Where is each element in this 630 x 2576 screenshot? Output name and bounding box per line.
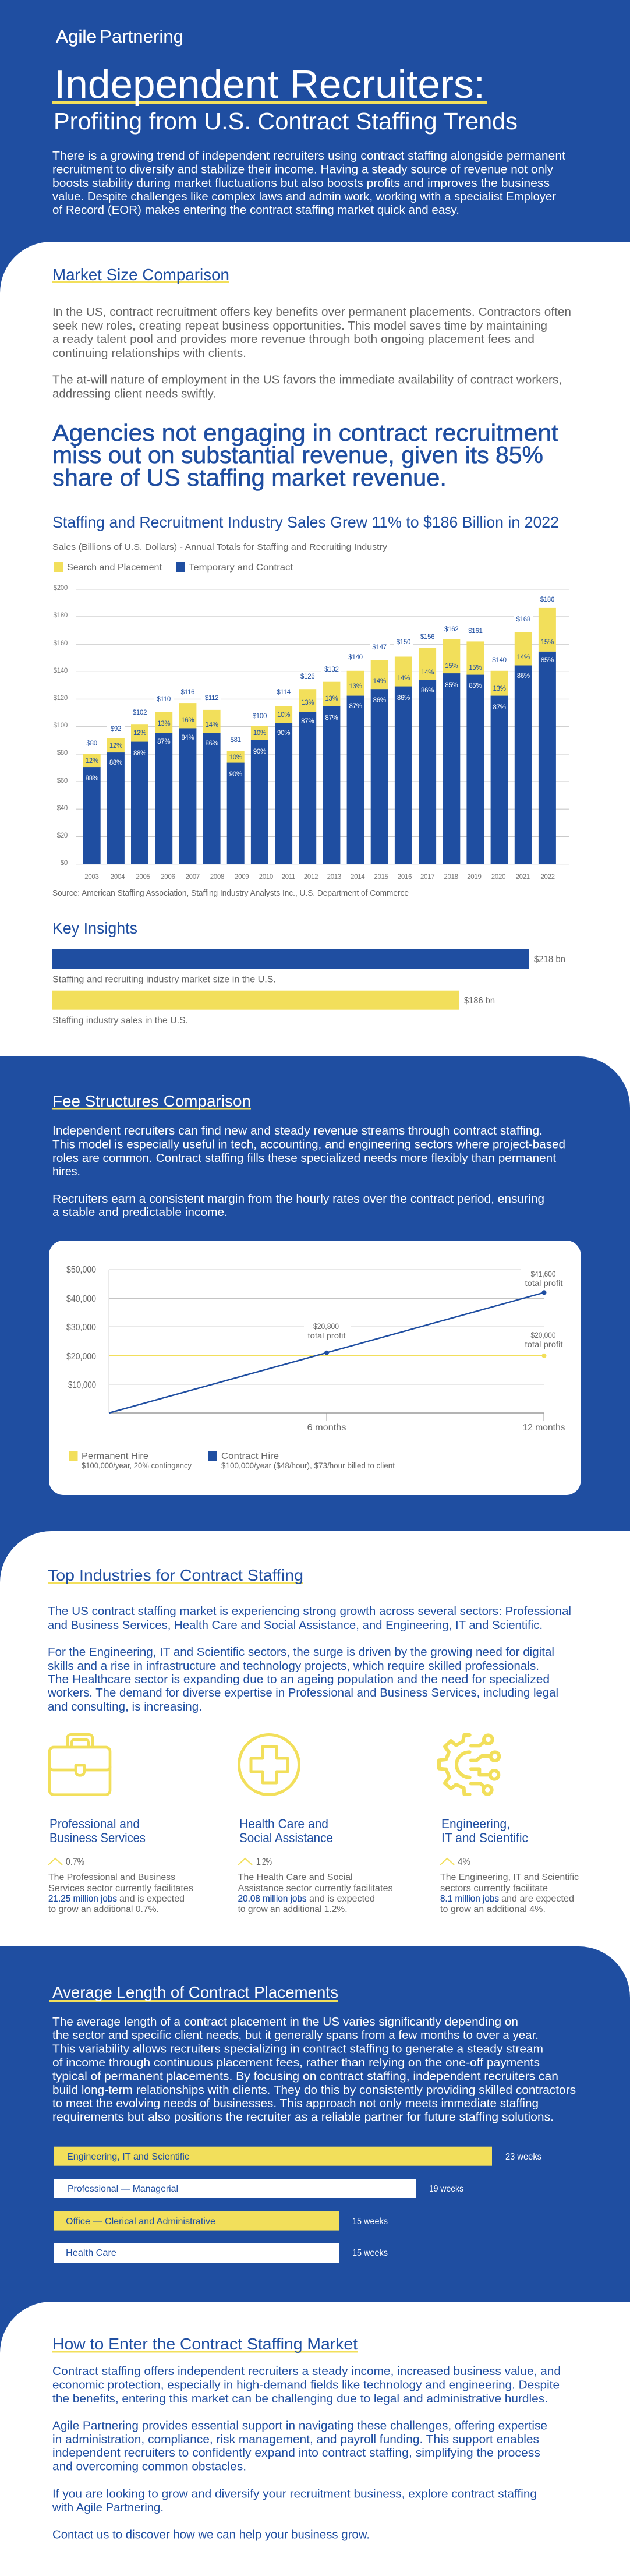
blue percentage labels: 85% [541,657,554,664]
column: health care and social assistance [238,1734,393,1914]
heading: top industries: Top Industries for Contract Staffing [48,1566,303,1584]
blue percentage labels: 90% [253,748,266,755]
yellow percentage labels: 13% [157,720,170,727]
x axis labels: 12 months [523,1423,565,1433]
bar total labels: $168 [516,616,530,623]
x axis year labels: 2016 [398,874,412,881]
y axis labels: $100 [54,722,68,729]
bar: professional managerial: 19 weeks [429,2184,463,2194]
data labels: $41,600 [531,1269,556,1278]
description: 21.25 million jobs [48,1894,117,1904]
average length paragraph: of income through continuous placement fees, rather than relying on the one-off payments [52,2056,540,2069]
title: Independent Recruiters: [54,62,485,107]
line: permanent hire [109,1354,546,1358]
bar total labels: $162 [444,626,458,633]
bar total labels: $114 [277,689,291,696]
y axis labels: $140 [54,667,68,674]
growth indicator: 0.7% [66,1856,84,1867]
top industries paragraph: The Healthcare sector is expanding due to an ageing population and the need for specialized [48,1673,550,1686]
description: to grow an additional 1.2%. [238,1904,348,1914]
average length paragraph: build long-term relationships with clients. They do this by consistently providing skilled contractors [52,2084,576,2097]
x axis year labels: 2011 [282,874,295,881]
x axis year labels: 2021 [516,874,530,881]
description: The Health Care and Social [238,1872,353,1882]
panel: market size comparison [52,266,571,1026]
data labels: total profit [307,1331,346,1340]
logo [56,26,183,47]
yellow percentage labels: 14% [517,654,530,661]
card: profit line chart [49,1241,581,1495]
title [49,1817,146,1845]
yellow percentage labels: 12% [133,730,146,737]
data labels: $20,000 [531,1330,556,1340]
y axis labels: $50,000 [66,1265,96,1275]
bar total labels: $92 [111,726,121,733]
blue percentage labels: 86% [517,673,530,680]
insight bar: market size: Staffing and recruiting industry market size in the U.S. [52,975,276,984]
bar total labels: $156 [420,634,434,641]
y axis labels: $40 [57,805,68,812]
yellow percentage labels: 14% [397,675,410,682]
average length paragraph: requirements but also positions the recruiter as a reliable partner for future staffing solutions. [52,2111,554,2123]
insight bar: market size [52,949,565,984]
blue percentage labels [86,657,554,782]
average length paragraph: The average length of a contract placement in the US varies significantly depending on [52,2016,518,2029]
y axis labels: $160 [54,640,68,647]
x axis year labels: 2020 [491,874,505,881]
chart legend: Search and Placement [67,563,162,573]
bar total labels: $126 [300,673,314,680]
market size paragraph: The at-will nature of employment in the US favors the immediate availability of contract workers, [52,374,562,387]
heading: how to enter: How to Enter the Contract Staffing Market [52,2335,358,2353]
fee structures paragraph: a stable and predictable income. [52,1206,228,1219]
y axis labels: $200 [54,585,68,592]
bar total labels: $140 [348,654,363,661]
description: Services sector currently facilitates [48,1884,193,1893]
description: and is expected [309,1894,375,1904]
x axis year labels: 2012 [304,874,318,881]
y axis labels: $60 [57,778,68,785]
growth indicator: 4% [458,1856,470,1867]
blue percentage labels: 85% [469,683,482,690]
yellow percentage labels: 10% [229,754,242,761]
title [441,1817,528,1845]
line: contract hire [109,1290,546,1413]
title [239,1817,333,1845]
x axis year labels: 2018 [444,874,458,881]
y axis labels: $0 [61,860,68,867]
fee structures paragraph: hires. [52,1165,80,1178]
intro paragraph [52,150,565,217]
panel: how to enter the market [52,2335,561,2542]
yellow percentage labels: 15% [541,639,554,646]
x axis year labels: 2006 [161,874,175,881]
x axis year labels: 2007 [186,874,200,881]
market size paragraph: seek new roles, creating repeat business opportunities. This model saves time by maintaining [52,320,547,333]
bar total labels: $110 [157,696,171,703]
closing paragraphs [52,2365,561,2542]
chart grid and axes [109,1270,544,1421]
yellow percentage labels: 14% [421,669,434,676]
x axis labels [307,1423,565,1433]
x axis year labels: 2014 [351,874,365,881]
closing paragraphs: economic protection, especially in high-demand fields like technology and engineering. Despite [52,2379,560,2391]
title: Engineering, [441,1817,510,1831]
y axis labels: $10,000 [68,1380,96,1390]
average length paragraph: typical of permanent placements. By focusing on contract staffing, independent recruiters can [52,2070,558,2083]
bar total labels: $161 [468,628,483,635]
bar total labels: $102 [133,709,147,716]
title: Health Care and [239,1817,328,1831]
bar total labels: $116 [181,689,194,696]
heading: market size comparison: Market Size Comparison [52,266,229,284]
title: Business Services [49,1831,146,1845]
bar total labels: $140 [492,657,507,664]
description: The Professional and Business [48,1872,175,1882]
y axis labels: $20 [57,832,68,839]
intro paragraph: There is a growing trend of independent recruiters using contract staffing alongside permanent [52,150,565,162]
stacked bar chart [54,585,569,881]
market size paragraph [52,306,571,401]
top industries paragraph: skills and a rise in infrastructure and technology projects, which require skilled professionals. [48,1660,539,1673]
closing paragraphs: the benefits, entering this market can be challenging due to legal and administrative hurdles. [52,2393,548,2405]
x axis year labels: 2009 [235,874,249,881]
chart legend: Temporary and Contract [189,563,293,573]
y axis labels: $40,000 [66,1294,96,1304]
column: engineering, IT and scientific [439,1735,579,1914]
yellow percentage labels: 13% [301,699,314,706]
legend: permanent hire [69,1451,192,1470]
bar: professional managerial [54,2179,463,2198]
x axis year labels: 2017 [420,874,434,881]
blue percentage labels: 90% [229,771,242,778]
legend: permanent hire: $100,000/year, 20% contingency [82,1461,192,1470]
description [440,1872,579,1914]
bar: health care [54,2243,388,2263]
top industries paragraph [47,1605,571,1713]
yellow percentage labels: 15% [445,663,458,670]
heading: fee structures: Fee Structures Comparison [52,1092,251,1110]
bar: office clerical and administrative: Office — Clerical and Administrative [66,2217,215,2227]
bar total labels: $132 [324,666,339,673]
intro paragraph: of Record (EOR) makes entering the contract staffing market quick and easy. [52,204,459,217]
top industries paragraph: workers. The demand for diverse expertise in Professional and Business Services, including legal [47,1687,558,1699]
panel: average length of contract placements [49,1983,576,2263]
blue percentage labels: 87% [301,718,314,725]
panel: fee structures comparison [49,1092,581,1495]
yellow bar segments: search and placement [83,608,556,768]
top industries paragraph: and consulting, is increasing. [48,1701,202,1713]
yellow percentage labels: 13% [493,685,506,692]
average length paragraph: This variability allows recruiters specializing in contract staffing to generate a steady stream [52,2043,543,2056]
chart caption: Sales (Billions of U.S. Dollars) - Annual Totals for Staffing and Recruiting Industry [52,542,388,552]
y axis labels: $120 [54,695,68,702]
description: Assistance sector currently facilitates [238,1884,393,1893]
bar total labels [87,596,554,747]
intro paragraph: boosts stability during market fluctuations but also boosts profits and improves the business [52,177,550,190]
y axis labels: $20,000 [66,1352,96,1362]
panel: header [52,26,565,217]
callout: 85% share: miss out on substantial revenue, given its 85% [52,441,543,468]
bar total labels: $150 [397,639,410,646]
column: professional and business services [48,1734,193,1914]
yellow percentage labels [86,639,554,765]
description: 20.08 million jobs [238,1894,307,1904]
yellow percentage labels: 13% [349,683,362,690]
heading: key insights: Key Insights [52,919,137,937]
blue percentage labels: 90% [277,730,290,737]
description: to grow an additional 0.7%. [48,1904,159,1914]
blue percentage labels: 86% [397,695,410,702]
fee structures paragraph: Recruiters earn a consistent margin from the hourly rates over the contract period, ensuring [52,1193,544,1206]
subtitle: Profiting from U.S. Contract Staffing Trends [54,108,518,135]
x axis year labels: 2022 [540,874,555,881]
closing paragraphs: and overcoming common obstacles. [52,2460,246,2473]
legend: contract hire: $100,000/year ($48/hour), $73/hour billed to client [221,1461,395,1470]
yellow percentage labels: 15% [469,665,482,672]
closing paragraphs: Contract staffing offers independent recruiters a steady income, increased business value, and [52,2365,561,2378]
x axis year labels: 2010 [259,874,273,881]
bar: health care: 15 weeks [352,2248,388,2258]
description: The Engineering, IT and Scientific [440,1872,579,1882]
yellow percentage labels: 16% [181,717,194,724]
fee structures paragraph: roles are common. Contract staffing fills these specialized needs more flexibly than permanent [52,1152,556,1165]
legend: permanent hire: Permanent Hire [82,1451,148,1461]
blue bar segments: temporary and contract [83,652,556,864]
x axis year labels: 2004 [111,874,125,881]
x axis labels: 6 months [307,1423,346,1433]
description: 8.1 million jobs [440,1894,499,1904]
closing paragraphs: If you are looking to grow and diversify your recruitment business, explore contract staffing [52,2488,537,2501]
blue percentage labels: 86% [373,697,386,704]
y axis labels: $30,000 [66,1323,96,1333]
bar total labels: $100 [253,713,267,720]
bar total labels: $81 [231,737,241,744]
y axis labels: $80 [57,750,68,757]
growth indicator: 1.2% [256,1856,272,1867]
x axis year labels: 2005 [136,874,150,881]
closing paragraphs: independent recruiters to confidently expand into contract staffing, simplifying the process [52,2447,540,2460]
x axis year labels: 2015 [374,874,388,881]
market size paragraph: In the US, contract recruitment offers key benefits over permanent placements. Contractors often [52,306,571,319]
description: and is expected [119,1894,185,1904]
title: IT and Scientific [441,1831,528,1845]
x axis year labels: 2008 [210,874,224,881]
yellow percentage labels: 12% [86,758,98,765]
data labels: $20,800 [313,1321,339,1331]
icon: briefcase [49,1734,110,1795]
market size paragraph: a ready talent pool and provides more revenue through both ongoing placement fees and [52,333,535,346]
bar total labels: $80 [87,740,97,747]
yellow percentage labels: 10% [277,712,290,719]
insight bar: industry sales: Staffing industry sales in the U.S. [52,1016,188,1026]
blue percentage labels: 87% [325,715,338,722]
description [238,1872,393,1914]
logo: Partnering [100,26,183,47]
y axis labels [54,585,68,867]
chart source: Source: American Staffing Association, Staffing Industry Analysts Inc., U.S. Department of Commerce [52,889,409,898]
description: to grow an additional 4%. [440,1904,546,1914]
fee structures paragraph [52,1125,565,1219]
y axis labels: $180 [54,612,68,619]
bar: engineering, IT and scientific: 23 weeks [505,2152,541,2162]
x axis year labels: 2019 [467,874,482,881]
fee structures paragraph: This model is especially useful in tech, accounting, and engineering sectors where project-based [52,1138,565,1151]
blue percentage labels: 88% [133,750,146,757]
blue percentage labels: 86% [421,687,434,694]
chart heading: Staffing and Recruitment Industry Sales Grew 11% to $186 Billion in 2022 [52,513,559,531]
data labels: total profit [525,1278,563,1288]
description: and are expected [501,1894,574,1904]
title: Social Assistance [239,1831,333,1845]
blue percentage labels: 84% [181,734,194,741]
top industries paragraph: The US contract staffing market is experiencing strong growth across several sectors: Professional [48,1605,571,1618]
top industries paragraph: and Business Services, Health Care and Social Assistance, and Engineering, IT and Scientific. [48,1619,543,1632]
heading: average length: Average Length of Contract Placements [52,1983,338,2001]
closing paragraphs: in administration, compliance, risk management, and payroll funding. This support enables [52,2433,539,2446]
growth indicator [48,1856,84,1867]
yellow percentage labels: 14% [373,678,386,685]
yellow percentage labels: 10% [253,730,266,737]
bar: office clerical and administrative [54,2211,388,2231]
callout: 85% share [52,419,559,491]
closing paragraphs: with Agile Partnering. [52,2501,164,2514]
growth indicator [238,1856,272,1867]
blue percentage labels: 87% [349,703,362,710]
bar total labels: $147 [373,644,387,651]
chart legend [54,562,293,573]
closing paragraphs: Contact us to discover how we can help your business grow. [52,2529,370,2542]
description [48,1872,193,1914]
average length paragraph: to meet the evolving needs of businesses. This approach not only meets immediate staffing [52,2097,539,2110]
bar: health care: Health Care [66,2248,116,2258]
market size paragraph: addressing client needs swiftly. [52,388,216,401]
logo: Agile [56,26,97,47]
market size paragraph: continuing relationships with clients. [52,347,246,360]
x axis year labels: 2013 [327,874,341,881]
bar: office clerical and administrative: 15 weeks [352,2217,388,2227]
yellow percentage labels: 14% [206,722,218,729]
bar: engineering, IT and scientific: Engineering, IT and Scientific [67,2152,189,2162]
data labels [307,1269,563,1349]
blue percentage labels: 88% [86,775,98,782]
insight bar: industry sales: $186 bn [464,996,495,1006]
icon: medical cross [239,1734,299,1795]
y axis labels [66,1265,96,1390]
bar: professional managerial: Professional — Managerial [68,2184,178,2194]
blue percentage labels: 87% [157,738,170,745]
fee structures paragraph: Independent recruiters can find new and steady revenue streams through contract staffing. [52,1125,543,1137]
insight bar: industry sales [52,991,495,1026]
yellow percentage labels: 12% [109,743,122,750]
blue percentage labels: 88% [109,759,122,766]
yellow percentage labels: 13% [325,695,338,702]
blue percentage labels: 87% [493,704,506,711]
description: sectors currently facilitate [440,1884,548,1893]
bar: engineering, IT and scientific [54,2147,541,2166]
callout: 85% share: Agencies not engaging in contract recruitment [52,419,559,446]
intro paragraph: value. Despite challenges like complex laws and admin work, working with a specialist Employer [52,190,556,203]
x axis year labels: 2003 [84,874,99,881]
intro paragraph: recruitment to diversify and stabilize their income. Having a steady source of revenue not only [52,163,553,176]
average length paragraph: the sector and specific client needs, but it generally spans from a few months to over a year. [52,2029,539,2042]
callout: 85% share: share of US staffing market revenue. [52,464,447,491]
bar total labels: $112 [205,695,218,702]
icon: gear circuit [439,1735,499,1794]
data labels: total profit [525,1340,563,1349]
x axis year labels [84,874,555,881]
title: Professional and [49,1817,140,1831]
average length paragraph [52,2016,576,2123]
closing paragraphs: Agile Partnering provides essential support in navigating these challenges, offering expertise [52,2419,547,2432]
growth indicator [440,1856,470,1867]
blue percentage labels: 86% [206,740,218,747]
bar total labels: $186 [540,596,554,603]
legend: contract hire [208,1451,395,1470]
insight bar: market size: $218 bn [534,955,565,964]
panel: top industries [47,1566,579,1914]
top industries paragraph: For the Engineering, IT and Scientific sectors, the surge is driven by the growing need for digital [48,1646,554,1659]
blue percentage labels: 85% [445,682,458,689]
legend: contract hire: Contract Hire [221,1451,279,1461]
